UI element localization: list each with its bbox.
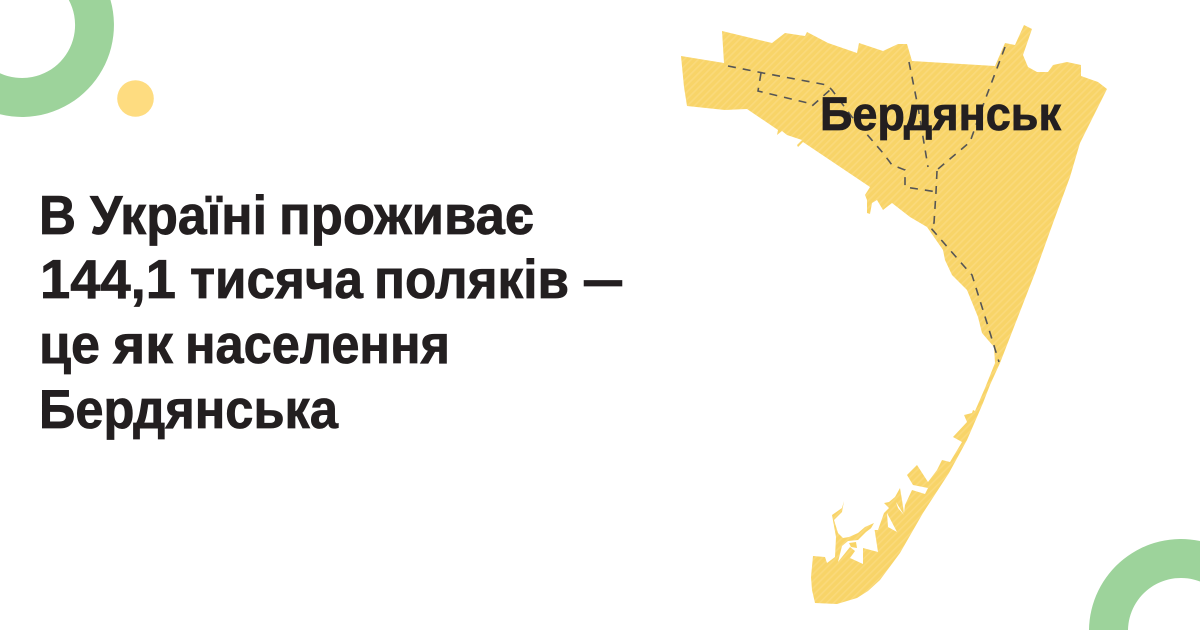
title: поляків — [374, 248, 569, 310]
title: В — [39, 184, 76, 246]
title: Україні — [90, 184, 267, 246]
lagoon cut-outs — [838, 526, 878, 564]
title: населення — [185, 313, 450, 375]
district borders — [728, 47, 1005, 362]
decoration: green ring top left — [0, 0, 114, 117]
map: Berdiansk city — [681, 25, 1107, 604]
title: як — [112, 313, 173, 375]
title: — — [584, 248, 622, 310]
title: це — [39, 313, 100, 375]
lagoon islet — [849, 542, 857, 548]
city territory — [681, 25, 1107, 604]
coastal inlets — [887, 502, 904, 532]
map label: Бердянськ — [820, 87, 1061, 140]
title: тисяча — [190, 248, 363, 310]
decoration: green ring bottom right — [1089, 539, 1200, 630]
decoration: yellow dot — [117, 80, 154, 117]
title: проживає — [279, 184, 534, 246]
title: Бердянська — [39, 378, 338, 440]
title — [39, 184, 622, 440]
title: 144,1 — [40, 248, 176, 310]
